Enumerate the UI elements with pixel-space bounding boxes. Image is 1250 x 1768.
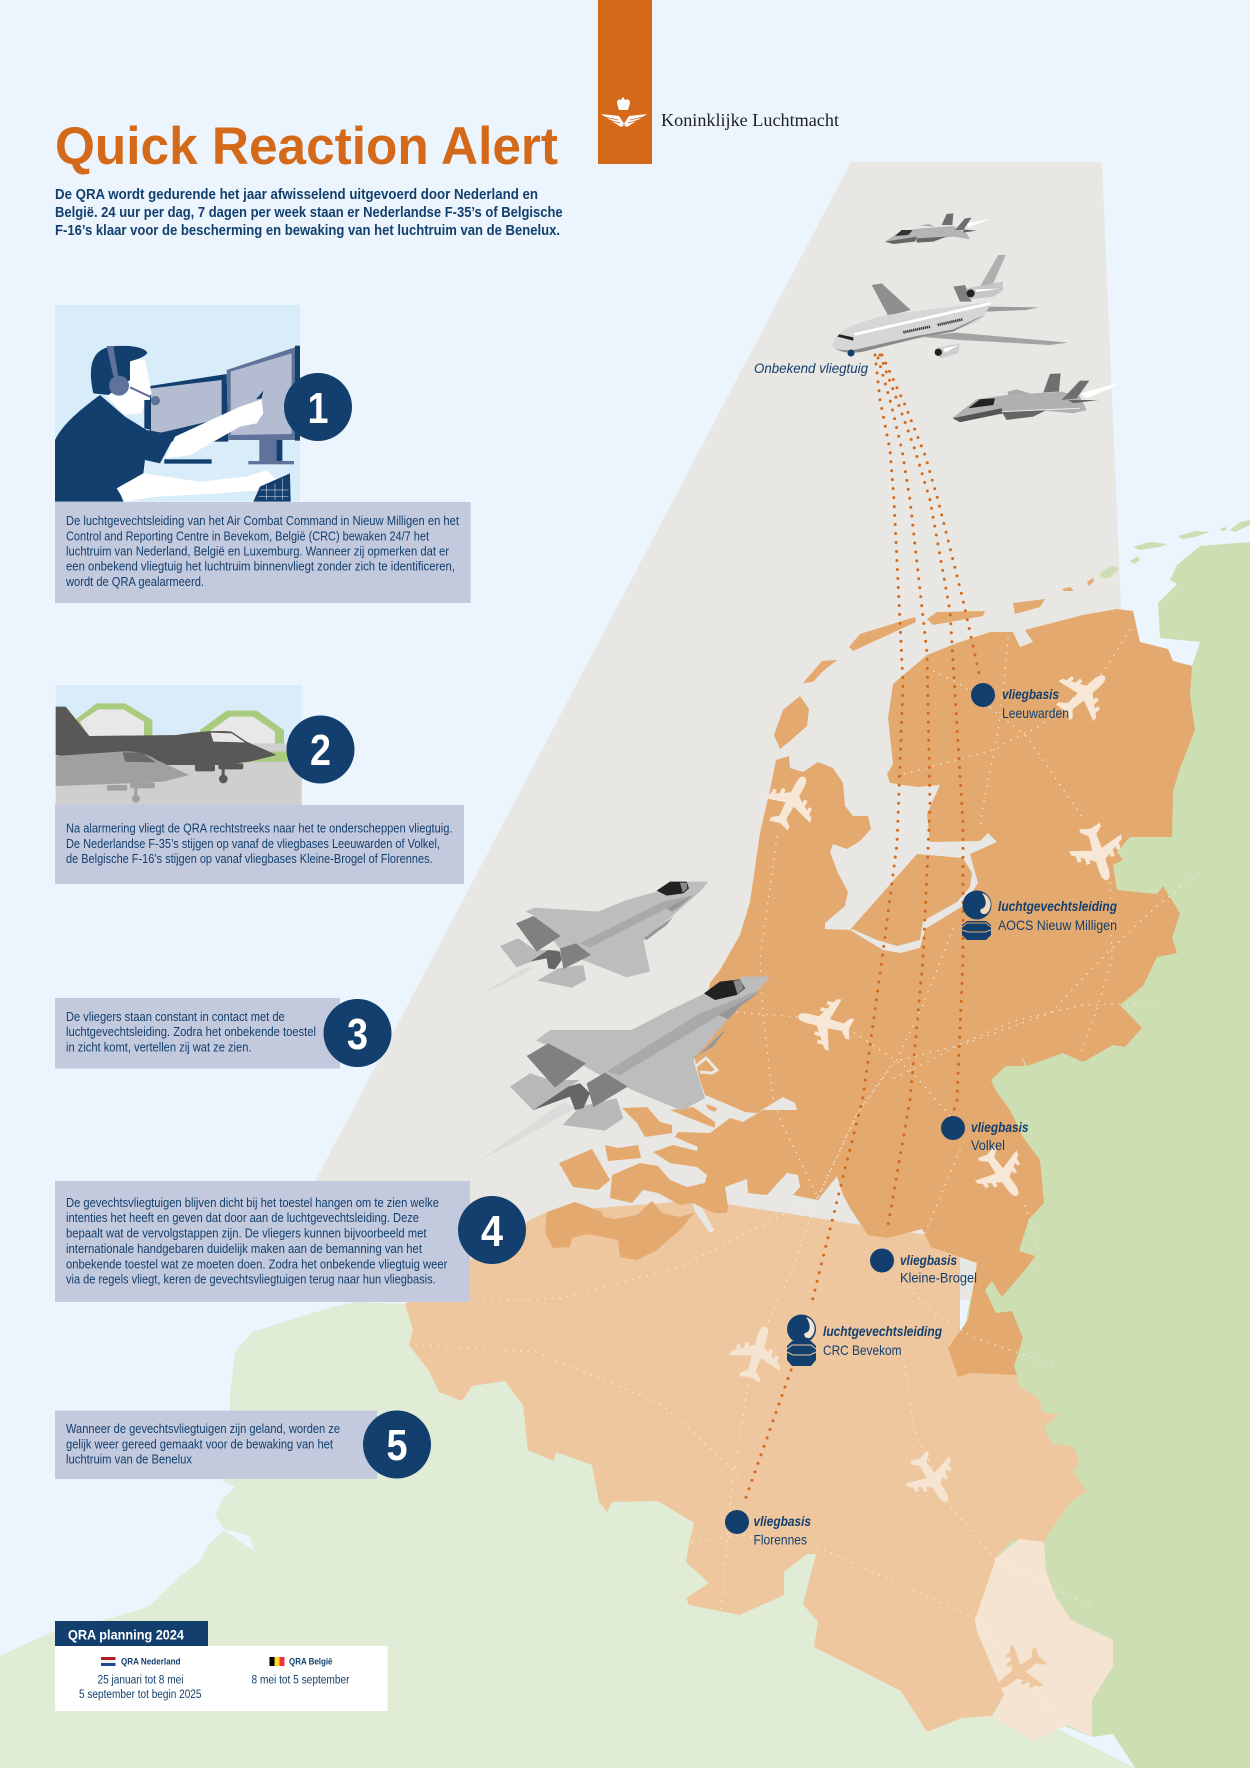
panel: step 5 text: gelijk weer gereed gemaakt voor de bewaking van het: [66, 1438, 333, 1452]
map: Dutch islands: [545, 578, 1094, 1260]
marker: vliegbasis Volkel: vliegbasis: [971, 1119, 1029, 1135]
badge: number 3: 3: [347, 1010, 368, 1059]
badge: number 2: 2: [310, 726, 331, 775]
marker: vliegbasis Florennes: [725, 1510, 811, 1548]
panel: step 1 text: een onbekend vliegtuig het luchtruim binnenvliegt zonder zich te identificeren,: [66, 560, 455, 574]
icons: small planes on the map: [724, 656, 1133, 1706]
icon: Dutch flag: [101, 1657, 116, 1666]
icon: lower F-35: [953, 373, 1127, 422]
panel: step 2 text: [55, 805, 464, 884]
orange dotted interception routes: [744, 355, 980, 1503]
panel: step 4 text: [55, 1181, 470, 1302]
map: Belgium: [405, 1200, 1086, 1732]
panel: step 2 text: de Belgische F-16’s stijgen op vanaf vliegbases Kleine-Brogel of Florennes.: [66, 852, 433, 866]
marker: vliegbasis Florennes: Florennes: [754, 1532, 807, 1548]
marker: luchtgevechtsleiding AOCS Nieuw Milligen: luchtgevechtsleiding: [998, 898, 1117, 914]
panel: step 4 text: onbekende toestel wat ze moeten doen. Zodra het onbekende vliegtuig weer: [66, 1257, 447, 1271]
badge: number 4: 4: [481, 1207, 503, 1256]
white dotted flight routes: [416, 630, 1198, 1714]
badge: number 3: [324, 999, 392, 1067]
panel: QRA planning 2024: 5 september tot begin 2025: [79, 1689, 202, 1701]
label: unknown aircraft: [754, 350, 868, 376]
panel: QRA planning 2024: [55, 1621, 388, 1711]
panel: step 3 text: De vliegers staan constant in contact met de: [66, 1010, 285, 1024]
marker: luchtgevechtsleiding CRC Bevekom: luchtgevechtsleiding: [823, 1323, 942, 1339]
panel: step 1 text: [55, 502, 470, 603]
badge: number 2: [286, 716, 354, 784]
marker: luchtgevechtsleiding AOCS Nieuw Milligen: [962, 890, 1117, 940]
panel: step 5 text: [55, 1410, 377, 1479]
map: France and Belgian coast land: [0, 1302, 1135, 1768]
panel: step 4 text: intenties het heeft en geven dat door aan de luchtgevechtsleiding. Deze: [66, 1211, 419, 1225]
marker: vliegbasis Kleine-Brogel: [870, 1248, 977, 1286]
panel: QRA planning 2024: QRA België: [289, 1656, 332, 1668]
panel: step 4 text: bepaalt wat de vervolgstappen zijn. De vliegers kunnen bijvoorbeeld met: [66, 1226, 427, 1240]
icon: unidentified airliner: [833, 255, 1068, 358]
marker: luchtgevechtsleiding CRC Bevekom: CRC Bevekom: [823, 1342, 902, 1358]
marker: vliegbasis Kleine-Brogel: Kleine-Brogel: [900, 1270, 977, 1286]
panel: QRA planning 2024: 25 januari tot 8 mei: [98, 1674, 184, 1686]
marker: vliegbasis Florennes: vliegbasis: [754, 1513, 811, 1529]
panel: step 5 text: Wanneer de gevechtsvliegtuigen zijn geland, worden ze: [66, 1422, 340, 1436]
icon: upper F-35: [885, 213, 992, 244]
badge: number 1: 1: [308, 384, 328, 433]
panel: step 1 text: wordt de QRA gealarmeerd.: [65, 575, 204, 589]
map: Luxembourg: [975, 1539, 1113, 1741]
title: Quick Reaction Alert: [55, 117, 558, 176]
panel: step 5 text: luchtruim van de Benelux: [66, 1453, 193, 1467]
map: Germany: [950, 542, 1250, 1768]
marker: vliegbasis Leeuwarden: Leeuwarden: [1002, 705, 1069, 721]
badge: number 5: 5: [386, 1421, 408, 1470]
panel: step 4 text: via de regels vliegt, keren de gevechtsvliegtuigen terug naar hun vliegbasis.: [66, 1272, 436, 1286]
label: unknown aircraft: Onbekend vliegtuig: [754, 360, 868, 376]
panel: QRA planning 2024: QRA Nederland: [121, 1656, 181, 1668]
panel: step 2 text: De Nederlandse F-35’s stijgen op vanaf de vliegbases Leeuwarden of Volkel,: [66, 837, 440, 851]
logo: Koninklijke Luchtmacht: [598, 0, 839, 164]
marker: vliegbasis Volkel: Volkel: [971, 1137, 1005, 1153]
icon: crown and wings: [601, 97, 647, 127]
illustration: jets on the apron: [56, 685, 302, 805]
badge: number 4: [458, 1196, 526, 1264]
badge: number 1: [284, 373, 352, 441]
logo: Koninklijke Luchtmacht: Koninklijke Luchtmacht: [661, 110, 839, 130]
intro text: [55, 187, 563, 239]
map: German Wadden islands: [1100, 520, 1250, 578]
grey radar beam: [300, 162, 1122, 1300]
illustration: air controller at monitors: [55, 305, 300, 502]
intro text: F-16’s klaar voor de bescherming en bewaking van het luchtruim van de Benelux.: [55, 223, 560, 239]
marker: luchtgevechtsleiding CRC Bevekom: [787, 1314, 942, 1366]
intro text: De QRA wordt gedurende het jaar afwisselend uitgevoerd door Nederland en: [55, 187, 538, 203]
marker: vliegbasis Leeuwarden: vliegbasis: [1002, 686, 1059, 702]
icon: upper large fighter jet: [480, 882, 708, 995]
intro text: België. 24 uur per dag, 7 dagen per week staan er Nederlandse F-35’s of Belgische: [55, 205, 563, 221]
panel: step 3 text: luchtgevechtsleiding. Zodra het onbekende toestel: [66, 1025, 316, 1039]
marker: vliegbasis Leeuwarden: [971, 683, 1069, 721]
map: inland water channels: [693, 1058, 717, 1233]
icon: Belgian flag: [270, 1657, 284, 1666]
panel: step 1 text: luchtruim van Nederland, België en Luxemburg. Wanneer zij opmerken dat er: [66, 544, 449, 558]
panel: step 4 text: De gevechtsvliegtuigen blijven dicht bij het toestel hangen om te zien welke: [66, 1196, 439, 1210]
panel: step 4 text: internationale handgebaren duidelijk maken aan de bemanning van het: [66, 1242, 422, 1256]
marker: luchtgevechtsleiding AOCS Nieuw Milligen: AOCS Nieuw Milligen: [998, 917, 1117, 933]
icon: lower large fighter jet: [480, 977, 770, 1160]
panel: step 3 text: in zicht komt, vertellen zij wat ze zien.: [66, 1040, 252, 1054]
panel: step 1 text: De luchtgevechtsleiding van het Air Combat Command in Nieuw Milligen en het: [66, 514, 459, 528]
panel: step 1 text: Control and Reporting Centre in Bevekom, België (CRC) bewaken 24/7 het: [66, 530, 429, 544]
map: Netherlands mainland: [610, 609, 1195, 1377]
panel: QRA planning 2024: 8 mei tot 5 september: [252, 1674, 350, 1686]
panel: step 3 text: [55, 998, 340, 1068]
panel: QRA planning 2024: QRA planning 2024: [68, 1626, 184, 1642]
badge: number 5: [363, 1410, 431, 1478]
marker: vliegbasis Volkel: [941, 1116, 1029, 1153]
panel: step 2 text: Na alarmering vliegt de QRA rechtstreeks naar het te onderscheppen vliegtuig.: [66, 822, 452, 836]
marker: vliegbasis Kleine-Brogel: vliegbasis: [900, 1252, 957, 1268]
